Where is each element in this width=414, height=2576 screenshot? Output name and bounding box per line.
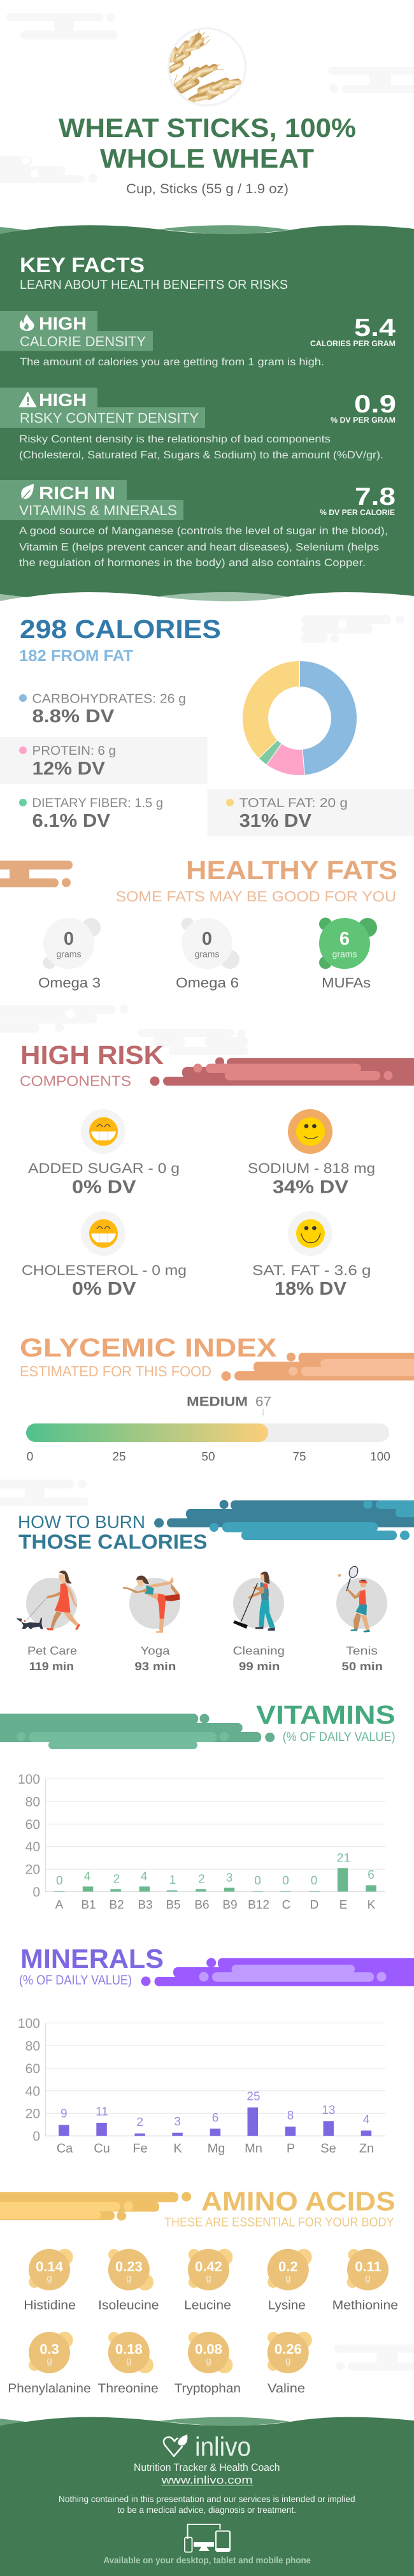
risk item: saturated fat: SAT. FAT - 3.6 g — [252, 1262, 371, 1278]
panel: minerals — [18, 1944, 414, 2156]
icon: grinning face — [89, 1117, 118, 1146]
stat: MUFAs: grams — [332, 949, 357, 959]
fact: rich in vitamins and minerals: RICH IN — [39, 483, 115, 503]
chart: minerals bar chart: 6 — [212, 2111, 218, 2125]
chart: vitamins bar chart: A — [55, 1898, 64, 1912]
risk item: added sugar — [28, 1109, 180, 1197]
amino: tryptophan: g — [206, 2355, 211, 2366]
risk item: added sugar: 0% DV — [72, 1177, 136, 1197]
icon: warning triangle — [19, 392, 36, 407]
icon: woman walking dog — [17, 1571, 80, 1630]
stat: omega 6: 0 — [202, 929, 212, 949]
stat: MUFAs — [319, 918, 377, 991]
amino: histidine: Histidine — [24, 2299, 76, 2313]
chart: minerals bar chart: 8 — [287, 2109, 294, 2123]
amino: leucine: Leucine — [184, 2299, 231, 2313]
legend: total fat: TOTAL FAT: 20 g — [239, 796, 348, 810]
chart: minerals bar chart: 13 — [322, 2104, 335, 2117]
chart: vitamins bar chart: 80 — [25, 1794, 40, 1809]
amino: tryptophan: 0.08 — [195, 2341, 222, 2357]
panel: calories — [0, 615, 414, 836]
chart: minerals bar chart: 80 — [25, 2039, 40, 2053]
risk item: sodium: SODIUM - 818 mg — [248, 1160, 375, 1176]
amino: tryptophan: Tryptophan — [175, 2382, 241, 2396]
subheading: components: COMPONENTS — [20, 1073, 131, 1089]
heading: glycemic index: GLYCEMIC INDEX — [20, 1333, 276, 1362]
chart: minerals bar chart: 60 — [25, 2062, 40, 2076]
chart: minerals bar chart: 4 — [363, 2113, 370, 2127]
decoration: purple streaks — [141, 1958, 414, 1986]
icon: woman doing yoga — [123, 1576, 180, 1633]
chart: minerals bar chart: 40 — [25, 2084, 40, 2099]
heading: those calories: THOSE CALORIES — [18, 1530, 208, 1553]
fact: calorie density: The amount of calories you are getting from 1 gram is high. — [20, 356, 324, 368]
gauge scale: 100 — [370, 1450, 390, 1464]
fact: calorie density: CALORIE DENSITY — [20, 333, 146, 349]
chart: minerals bar chart: Ca — [57, 2142, 73, 2156]
amino: isoleucine — [98, 2249, 159, 2313]
panel: key facts — [0, 225, 414, 601]
amino: threonine: 0.18 — [115, 2341, 143, 2357]
chart: minerals bar chart: 11 — [96, 2105, 108, 2119]
chart: vitamins bar chart: 2 — [113, 1873, 120, 1886]
gauge scale: 50 — [201, 1450, 215, 1464]
decoration: red streaks — [150, 1057, 414, 1086]
logo: inlivo — [164, 2432, 251, 2462]
amino: methionine: g — [365, 2273, 371, 2284]
chart: vitamins bar chart: 0 — [311, 1874, 317, 1888]
amino: tryptophan — [175, 2332, 241, 2396]
chart: minerals bar chart: 100 — [18, 2016, 40, 2031]
stat: omega 6 — [176, 918, 239, 991]
decoration: teal streaks — [154, 1500, 414, 1540]
subtitle: serving size: Cup, Sticks (55 g / 1.9 oz) — [126, 182, 289, 196]
decoration: green streaks — [0, 1714, 275, 1749]
decoration: orange streaks — [222, 1353, 414, 1381]
risk item: saturated fat: 18% DV — [275, 1279, 347, 1299]
panel: high risk components — [20, 1040, 414, 1299]
panel: how to burn those calories — [17, 1500, 414, 1673]
chart: vitamins bar chart: 1 — [169, 1874, 176, 1887]
chart: vitamins bar chart: 0 — [254, 1874, 261, 1888]
subheading: (% OF DAILY VALUE) — [19, 1973, 132, 1988]
chart: macronutrient donut — [242, 660, 357, 776]
decoration: orange streaks — [0, 861, 73, 887]
chart: vitamins bar chart: 100 — [18, 1772, 40, 1787]
legend: dietary fiber: 6.1% DV — [32, 811, 111, 831]
risk item: cholesterol — [22, 1211, 187, 1299]
fact: risky content density: 0.9 — [354, 391, 396, 418]
legend: carbohydrates: 8.8% DV — [32, 706, 115, 727]
legend: carbohydrates: CARBOHYDRATES: 26 g — [32, 692, 186, 706]
icon: smiling face — [296, 1219, 325, 1248]
gauge: glycemic index bar — [26, 1423, 389, 1442]
website link: www.inlivo.com — [161, 2474, 253, 2486]
icon: tennis player — [336, 1565, 387, 1633]
chart: minerals bar chart: Se — [320, 2142, 336, 2156]
chart: minerals bar chart: Mn — [245, 2142, 262, 2156]
icon: grinning face — [89, 1219, 118, 1248]
panel: amino acids — [0, 2187, 398, 2396]
icon: leaf — [21, 484, 34, 499]
activity: cleaning — [233, 1572, 285, 1673]
amino: leucine — [184, 2249, 232, 2313]
chart: vitamins bar chart: E — [339, 1898, 347, 1912]
chart: minerals bar chart: 9 — [61, 2107, 68, 2121]
chart: vitamins bar chart: B5 — [166, 1898, 181, 1912]
subheading: LEARN ABOUT HEALTH BENEFITS OR RISKS — [20, 278, 288, 292]
chart: vitamins bar chart: B2 — [109, 1898, 124, 1912]
chart: minerals bar chart: 25 — [246, 2090, 261, 2104]
fact: rich in vitamins and minerals: A good source of Manganese (controls the level of sugar in the blood), — [19, 525, 388, 537]
legend: protein: 12% DV — [32, 759, 106, 779]
stat: omega 3: 0 — [64, 929, 74, 949]
risk item: saturated fat — [252, 1211, 371, 1299]
fact: calorie density — [0, 311, 396, 368]
amino: isoleucine: Isoleucine — [98, 2299, 159, 2313]
risk item: sodium — [248, 1109, 375, 1197]
stat: omega 3: grams — [57, 949, 81, 959]
legend: total fat — [208, 789, 414, 836]
gauge scale: 0 — [27, 1450, 33, 1464]
fact: calorie density: 5.4 — [354, 314, 396, 342]
heading: key facts: KEY FACTS — [20, 253, 145, 277]
disclaimer — [59, 2494, 355, 2515]
amino: isoleucine: 0.23 — [115, 2259, 143, 2274]
amino: threonine — [97, 2332, 159, 2396]
chart: vitamins bar chart: 0 — [56, 1874, 63, 1888]
fact: risky content density: Risky Content density is the relationship of bad components — [19, 433, 331, 445]
fact: risky content density: RISKY CONTENT DENSITY — [20, 410, 199, 426]
risk item: sodium: 34% DV — [273, 1177, 349, 1197]
activity: pet care: Pet Care — [27, 1645, 77, 1657]
activity: cleaning: 99 min — [239, 1660, 280, 1673]
fact: risky content density: % DV PER GRAM — [331, 416, 396, 425]
fact: risky content density: HIGH — [39, 390, 87, 410]
chart: vitamins bar chart: 0 — [32, 1885, 40, 1900]
amino: lysine: 0.2 — [278, 2259, 298, 2274]
activity: yoga: 93 min — [134, 1660, 176, 1673]
chart: minerals bar chart: P — [287, 2142, 295, 2156]
subheading: (% OF DAILY VALUE) — [283, 1730, 396, 1744]
amino: methionine — [332, 2249, 398, 2313]
legend: total fat: 31% DV — [239, 811, 312, 831]
risk item: cholesterol: 0% DV — [72, 1279, 136, 1299]
fact: calorie density: HIGH — [39, 314, 87, 333]
icon: wheat photo in ring — [168, 28, 246, 106]
legend: protein: PROTEIN: 6 g — [32, 744, 116, 758]
fact: rich in vitamins and minerals: 7.8 — [355, 483, 396, 511]
chart: vitamins bar chart: C — [282, 1898, 290, 1912]
title — [59, 113, 356, 173]
legend: protein — [0, 737, 208, 784]
chart: vitamins bar chart: 21 — [337, 1851, 350, 1865]
gauge label: medium 67: 67 — [255, 1394, 271, 1409]
chart: vitamins bar chart: 20 — [25, 1863, 40, 1877]
logo: inlivo: inlivo — [195, 2432, 251, 2462]
amino: methionine: Methionine — [332, 2299, 398, 2313]
amino: valine — [268, 2332, 312, 2396]
amino: lysine — [268, 2249, 312, 2313]
disclaimer: to be a medical advice, diagnosis or treatment. — [117, 2505, 296, 2515]
chart: vitamins bar chart — [18, 1772, 385, 1912]
stat: omega 3: Omega 3 — [38, 975, 101, 991]
chart: vitamins bar chart: 4 — [141, 1870, 148, 1884]
gauge label: medium 67: MEDIUM — [187, 1394, 248, 1409]
fact: risky content density: (Cholesterol, Saturated Fat, Sugars & Sodium) to the amount (%DV/gr). — [19, 449, 383, 461]
risk item: added sugar: ADDED SUGAR - 0 g — [28, 1160, 180, 1176]
gauge label: medium 67 — [187, 1394, 271, 1416]
chart: vitamins bar chart: B9 — [222, 1898, 238, 1912]
amino: threonine: g — [126, 2355, 131, 2366]
chart: vitamins bar chart: 3 — [226, 1872, 232, 1885]
heading: vitamins: VITAMINS — [256, 1700, 396, 1729]
heading: amino acids: AMINO ACIDS — [201, 2187, 396, 2216]
amino: phenylalanine — [8, 2332, 91, 2396]
amino: phenylalanine: g — [46, 2355, 52, 2366]
fact: rich in vitamins and minerals: % DV PER CALORIE — [320, 508, 395, 517]
gauge scale: 75 — [292, 1450, 306, 1464]
subheading: THESE ARE ESSENTIAL FOR YOUR BODY — [164, 2216, 394, 2230]
activity: tennis: 50 min — [341, 1660, 383, 1673]
subheading: SOME FATS MAY BE GOOD FOR YOU — [116, 888, 396, 905]
amino: valine: Valine — [268, 2382, 305, 2396]
heading: calories: 298 CALORIES — [20, 615, 221, 644]
amino: lysine: g — [285, 2273, 290, 2284]
icon: smiling face — [296, 1117, 325, 1146]
chart: minerals bar chart: 3 — [174, 2115, 181, 2128]
chart: vitamins bar chart: 60 — [25, 1817, 40, 1832]
legend: carbohydrates — [19, 692, 186, 727]
amino: valine: g — [285, 2355, 290, 2366]
fact: calorie density: CALORIES PER GRAM — [310, 339, 396, 348]
header: food image and title — [59, 28, 356, 196]
chart: vitamins bar chart: 4 — [84, 1870, 91, 1884]
chart: minerals bar chart: 0 — [32, 2129, 40, 2144]
chart: minerals bar chart: Mg — [208, 2142, 225, 2156]
amino: leucine: g — [206, 2273, 211, 2284]
stat: omega 3 — [38, 918, 101, 991]
panel: healthy fats — [0, 855, 397, 991]
chart: minerals bar chart: 2 — [136, 2116, 143, 2129]
activity: tennis — [336, 1565, 387, 1673]
amino: threonine: Threonine — [97, 2382, 159, 2396]
amino: phenylalanine: 0.3 — [39, 2341, 59, 2357]
chart: minerals bar chart: Fe — [132, 2142, 148, 2156]
fact: rich in vitamins and minerals: Vitamin E (helps prevent cancer and heart diseases), Selenium (helps — [19, 542, 379, 553]
amino: phenylalanine: Phenylalanine — [8, 2382, 91, 2396]
heading: high risk: HIGH RISK — [20, 1040, 164, 1070]
chart: vitamins bar chart: 40 — [25, 1840, 40, 1854]
risk item: cholesterol: CHOLESTEROL - 0 mg — [22, 1262, 187, 1278]
amino: valine: 0.26 — [275, 2341, 302, 2357]
chart: vitamins bar chart: K — [368, 1898, 376, 1912]
decoration: yellow streaks — [0, 2192, 191, 2221]
panel: glycemic index — [20, 1333, 414, 1464]
gauge scale — [27, 1450, 390, 1464]
legend: dietary fiber: DIETARY FIBER: 1.5 g — [32, 796, 163, 810]
heading: minerals: MINERALS — [20, 1944, 164, 1974]
subheading: ESTIMATED FOR THIS FOOD — [20, 1363, 211, 1379]
chart: minerals bar chart: 20 — [25, 2107, 40, 2121]
chart: minerals bar chart: Zn — [359, 2142, 374, 2156]
availability note: Available on your desktop, tablet and mobile phone — [103, 2556, 311, 2566]
stat: MUFAs: 6 — [339, 929, 350, 949]
activity: pet care — [17, 1571, 80, 1673]
fact: risky content density — [0, 388, 396, 461]
amino: isoleucine: g — [126, 2273, 131, 2284]
fact: rich in vitamins and minerals: VITAMINS & MINERALS — [19, 502, 177, 518]
heading: how to burn: HOW TO BURN — [18, 1512, 145, 1532]
activity: tennis: Tenis — [346, 1645, 378, 1657]
amino: histidine: 0.14 — [36, 2259, 64, 2274]
fact: rich in vitamins and minerals — [0, 480, 396, 569]
icon: flame — [20, 314, 34, 331]
activity: yoga: Yoga — [140, 1645, 171, 1657]
stat: omega 6: grams — [195, 949, 219, 959]
heading: healthy fats: HEALTHY FATS — [186, 855, 397, 885]
chart: minerals bar chart: Cu — [94, 2142, 110, 2156]
chart: vitamins bar chart: 2 — [198, 1873, 205, 1886]
title: WHOLE WHEAT — [100, 143, 314, 173]
amino: methionine: 0.11 — [355, 2259, 382, 2274]
chart: minerals bar chart — [18, 2016, 385, 2156]
chart: vitamins bar chart: 0 — [282, 1874, 289, 1888]
title: WHEAT STICKS, 100% — [59, 113, 356, 143]
activity: pet care: 119 min — [29, 1660, 74, 1673]
chart: minerals bar chart: K — [173, 2142, 182, 2156]
fact: rich in vitamins and minerals: the regulation of hormones in the body) and also contains Copper. — [19, 557, 366, 569]
stat: omega 6: Omega 6 — [176, 975, 239, 991]
icon: devices — [185, 2524, 230, 2552]
disclaimer: Nothing contained in this presentation and our services is intended or implied — [59, 2494, 355, 2504]
amino: histidine: g — [46, 2273, 52, 2284]
gauge scale: 25 — [112, 1450, 126, 1464]
subheading: calories from fat: 182 FROM FAT — [19, 647, 133, 665]
activity: yoga — [123, 1576, 180, 1673]
amino: lysine: Lysine — [268, 2299, 306, 2313]
chart: vitamins bar chart: B12 — [248, 1898, 269, 1912]
chart: vitamins bar chart: D — [310, 1898, 318, 1912]
footer — [0, 2417, 414, 2576]
amino: leucine: 0.42 — [195, 2259, 222, 2274]
tagline: Nutrition Tracker & Health Coach — [134, 2462, 280, 2473]
chart: vitamins bar chart: B3 — [138, 1898, 153, 1912]
activity: cleaning: Cleaning — [233, 1645, 285, 1657]
chart: vitamins bar chart: B1 — [81, 1898, 96, 1912]
panel: vitamins — [0, 1700, 396, 1912]
chart: vitamins bar chart: 6 — [368, 1868, 375, 1882]
amino: histidine — [24, 2249, 76, 2313]
icon: woman sweeping — [233, 1572, 284, 1631]
stat: MUFAs: MUFAs — [322, 975, 371, 991]
legend: dietary fiber — [19, 796, 163, 831]
chart: vitamins bar chart: B6 — [194, 1898, 210, 1912]
